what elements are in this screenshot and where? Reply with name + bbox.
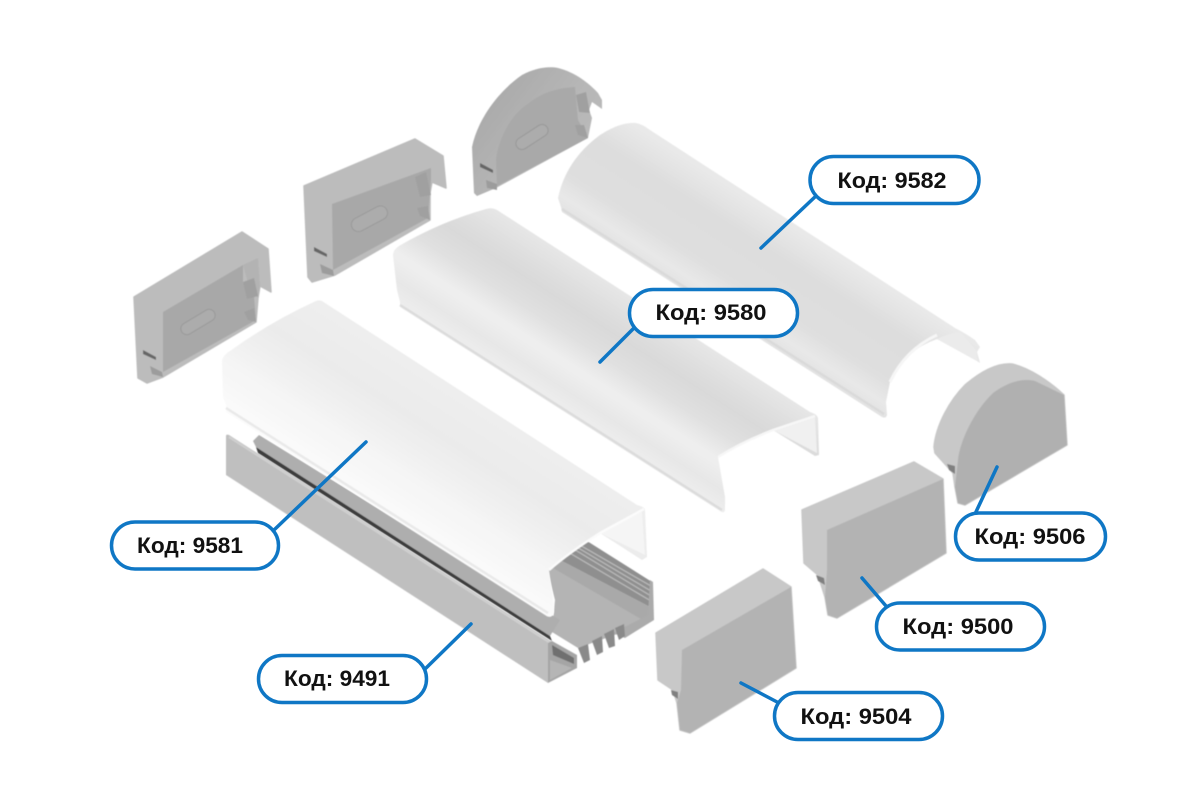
callout: Код 9504: Код: 9504 [800, 704, 912, 729]
callout: Код 9504 [741, 683, 942, 740]
callout: Код 9580 [600, 290, 798, 362]
callout: Код 9580: Код: 9580 [656, 300, 766, 325]
callout: Код 9491 [258, 624, 471, 702]
profile front end [548, 641, 577, 683]
icon: slot [514, 122, 550, 152]
profile interior [547, 541, 654, 648]
callout: Код 9581 [112, 442, 366, 569]
end cap 9504: rectangular outer view [656, 569, 796, 733]
end cap: half-round inner view [472, 67, 602, 196]
end cap 9500: rectangular outer view [802, 462, 946, 618]
end cap: rectangular inner view, left [134, 232, 271, 383]
callout: Код 9500 [862, 578, 1044, 650]
profile side wall [226, 435, 552, 683]
callout: Код 9582: Код: 9582 [838, 168, 946, 193]
icon: slot [349, 203, 390, 234]
end cap: rectangular inner view, centre [304, 139, 446, 282]
callout: Код 9582 [761, 156, 979, 248]
profile fins [578, 624, 625, 663]
cover 9580: flat diffuser [393, 208, 819, 512]
end cap 9506: half-round outer view [934, 364, 1067, 505]
callout: Код 9506: Код: 9506 [974, 524, 1086, 549]
icon: slot [179, 307, 217, 337]
aluminium profile 9491 [226, 435, 654, 683]
cover 9582: half-round diffuser [558, 123, 980, 418]
cover 9581: flat diffuser on profile [222, 300, 647, 617]
callout: Код 9491: Код: 9491 [284, 666, 390, 691]
callout: Код 9506 [956, 467, 1106, 560]
callout: Код 9500: Код: 9500 [902, 614, 1014, 639]
callout: Код 9581: Код: 9581 [137, 533, 243, 558]
